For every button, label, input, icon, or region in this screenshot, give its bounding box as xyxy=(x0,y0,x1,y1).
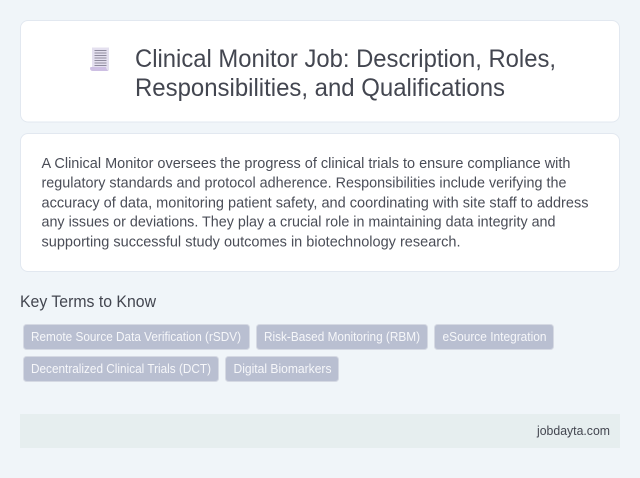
heading: key terms: Key Terms to Know xyxy=(20,293,156,311)
description text: supporting successful study outcomes in biotechnology research. xyxy=(42,234,460,250)
icon: document scroll xyxy=(90,48,109,71)
tag: digital biomarkers xyxy=(226,356,338,382)
tag: digital biomarkers: Digital Biomarkers xyxy=(234,362,332,376)
description text: accuracy of data, monitoring patient safety, and coordinating with site staff to address xyxy=(42,196,588,212)
title: Clinical Monitor Job: Description, Roles, xyxy=(135,45,556,73)
tag: DCT xyxy=(24,356,218,382)
description text xyxy=(42,156,588,250)
tag: RBM: Risk-Based Monitoring (RBM) xyxy=(264,330,420,344)
panel: description card xyxy=(20,134,620,272)
description text: any issues or deviations. They play a crucial role in maintaining data integrity and xyxy=(42,214,556,230)
tag: RBM xyxy=(256,324,428,350)
tag: rSDV xyxy=(24,324,250,350)
tag: DCT: Decentralized Clinical Trials (DCT) xyxy=(31,362,211,376)
tag: eSource: eSource Integration xyxy=(442,330,546,344)
tag: rSDV: Remote Source Data Verification (rSDV) xyxy=(31,330,241,344)
footer bar: jobdayta.com xyxy=(536,424,610,438)
title: Responsibilities, and Qualifications xyxy=(135,74,505,102)
description text: A Clinical Monitor oversees the progress of clinical trials to ensure compliance with xyxy=(42,156,570,172)
key term tags xyxy=(24,324,554,382)
title xyxy=(135,45,556,102)
panel: title card xyxy=(20,20,620,122)
footer bar xyxy=(20,414,620,448)
tag: eSource xyxy=(434,324,554,350)
description text: regulatory standards and protocol adherence. Responsibilities include verifying the xyxy=(42,176,566,192)
